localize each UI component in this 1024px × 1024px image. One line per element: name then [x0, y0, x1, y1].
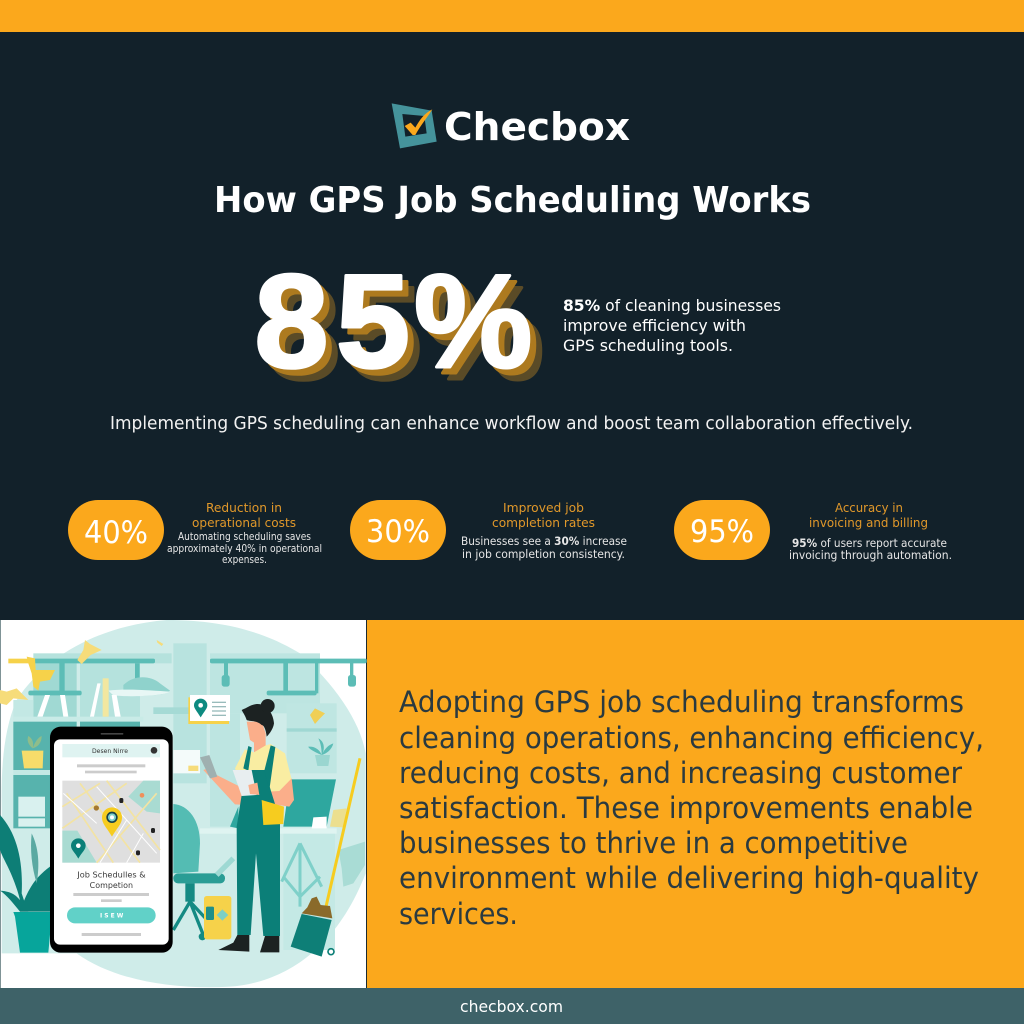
- chair: [173, 804, 233, 940]
- description 95%: [789, 536, 952, 562]
- conclusion text: services.: [399, 897, 518, 931]
- stat 95%: [674, 500, 952, 562]
- big stat 85%: 85%: [260, 254, 538, 402]
- conclusion text: Adopting GPS job scheduling transforms: [399, 685, 964, 719]
- right wall plant: [338, 842, 365, 887]
- right shelf plant: [308, 738, 333, 766]
- location card: [188, 695, 230, 724]
- value 40%: 40%: [84, 515, 148, 551]
- coat tail: [230, 807, 238, 828]
- smartphone: Desen Nirre: [92, 748, 128, 755]
- ceiling rails and lamps: [28, 659, 367, 696]
- conclusion text: [399, 685, 984, 931]
- conclusion text: businesses to thrive in a competitive: [399, 826, 908, 860]
- value 30%: 30%: [366, 514, 430, 550]
- footer: [0, 988, 1024, 1024]
- icon: teal map pin: [71, 838, 86, 859]
- description 30%: in job completion consistency.: [462, 547, 625, 561]
- stat description: improve efficiency with: [563, 316, 746, 335]
- logo: Checbox: [392, 103, 630, 149]
- big stat 85%: 85%: [254, 248, 532, 396]
- conclusion text: satisfaction. These improvements enable: [399, 791, 973, 825]
- clipboard: [233, 770, 257, 796]
- mop and bucket: [291, 758, 360, 957]
- footer url: checbox.com: [460, 997, 563, 1016]
- pill 40%: [68, 500, 164, 560]
- smartphone: I S E W: [100, 913, 123, 920]
- books: [37, 678, 121, 717]
- description 40%: approximately 40% in operational: [167, 542, 322, 555]
- smartphone: Job Schedulles &: [76, 871, 146, 880]
- conclusion text: reducing costs, and increasing customer: [399, 756, 962, 790]
- description 30%: Businesses see a 30% increase: [461, 534, 627, 548]
- hair: [242, 704, 274, 737]
- summary sentence: Implementing GPS scheduling can enhance workflow and boost team collaboration effectively.: [110, 413, 913, 434]
- big stat 85%: 85%: [266, 260, 544, 408]
- panel: illustration: [0, 620, 367, 988]
- description 40%: Automating scheduling saves: [178, 530, 311, 543]
- heading: completion rates: [492, 500, 595, 530]
- yellow pouch: [262, 800, 284, 825]
- yellow plant pot: [22, 736, 43, 768]
- yellow bucket: [204, 896, 231, 939]
- pill 95%: [674, 500, 770, 560]
- stat description: GPS scheduling tools.: [563, 336, 733, 355]
- desk and monitor: [200, 779, 347, 950]
- shoes: [218, 935, 249, 952]
- left arm: [203, 767, 247, 805]
- stat description: 85% of cleaning businesses: [563, 296, 781, 315]
- phone in hand: [200, 755, 217, 778]
- yellow decorative splashes: [0, 640, 325, 724]
- heading: completion rates: completion rates: [492, 515, 595, 530]
- value 95%: 95%: [690, 514, 754, 550]
- description 40%: [167, 530, 322, 566]
- stat 40%: [68, 500, 322, 566]
- pill 30%: [350, 500, 446, 560]
- heading: invoicing: invoicing and billing: [809, 515, 928, 530]
- shirt: [235, 744, 292, 797]
- shelves and room: [13, 643, 337, 828]
- stat description: [563, 296, 781, 355]
- description 40%: expenses.: [222, 553, 267, 566]
- description 95%: 95% of users report accurate: [792, 536, 947, 550]
- heading: operational costs: operational costs: [192, 515, 296, 530]
- title: How GPS Job Scheduling Works: [214, 180, 811, 221]
- illustration background blob: [2, 620, 366, 987]
- stat 30%: [350, 500, 627, 561]
- left potted plant: [0, 815, 52, 953]
- heading: invoicing: [809, 500, 928, 530]
- icon: yellow map pin: [102, 807, 122, 837]
- map: [62, 781, 160, 863]
- smartphone: [50, 727, 173, 953]
- conclusion text: environment while delivering high-quality: [399, 861, 979, 895]
- smartphone: Competion: [90, 881, 133, 890]
- description 95%: invoicing through automation.: [789, 548, 952, 562]
- icon: checkbox logo mark: [392, 103, 437, 148]
- description 30%: [461, 534, 627, 561]
- heading: operational costs: [192, 500, 296, 530]
- top orange band: [0, 0, 1024, 32]
- neck and face: [247, 722, 266, 752]
- right arm: [250, 778, 294, 807]
- hand: [248, 783, 259, 795]
- button: [67, 907, 156, 923]
- conclusion text: cleaning operations, enhancing efficiency,: [399, 721, 984, 755]
- panel: conclusion: [367, 620, 1024, 988]
- heading: invoicing: Accuracy in: [835, 500, 903, 515]
- overalls: [237, 770, 280, 936]
- heading: operational costs: Reduction in: [206, 500, 282, 515]
- heading: completion rates: Improved job: [503, 500, 584, 515]
- logo wordmark: Checbox: [444, 105, 630, 149]
- worker figure: [200, 699, 294, 952]
